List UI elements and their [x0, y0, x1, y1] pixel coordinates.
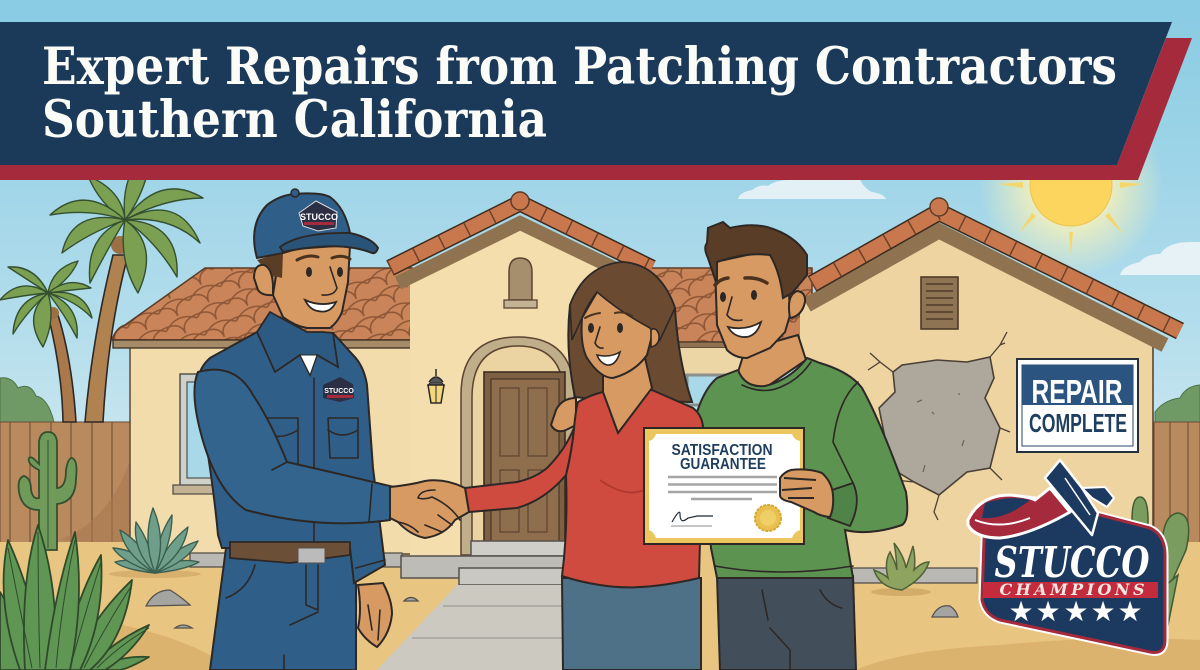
person: woman hair back: [568, 262, 692, 402]
damaged stucco patch with cracks: [868, 332, 1010, 520]
contractor head: [254, 245, 350, 328]
contractor sleeve: [194, 370, 394, 523]
house: left roof: [112, 268, 412, 348]
entry steps: [401, 541, 571, 585]
fence: right: [1154, 422, 1200, 556]
certificate: satisfaction guarantee: GUARANTEE: [680, 456, 766, 473]
person: woman hand on shoulder: [551, 398, 576, 431]
ground: [0, 542, 1200, 670]
certificate: satisfaction guarantee: [644, 428, 804, 544]
palm tree: small: [0, 261, 92, 422]
logo: stucco champions badge: ★★★★★: [1008, 596, 1143, 627]
logo: stucco champions badge: CHAMPIONS: [1000, 580, 1144, 599]
house: left window: [173, 374, 215, 494]
handshake: [390, 480, 469, 538]
house: right wing wall: [800, 235, 1153, 583]
person: woman jeans: [562, 578, 701, 670]
contractor belt: [230, 542, 350, 563]
house: centre gable: [390, 192, 652, 283]
house: mid roof: [640, 268, 812, 405]
cloud: centre: [738, 180, 886, 199]
certificate: satisfaction guarantee: SATISFACTION: [672, 442, 772, 459]
cactus: behind logo: [1132, 497, 1189, 640]
person: contractor: [194, 189, 394, 670]
house: small arched window: [504, 258, 537, 308]
logo: stucco champions badge: STUCCO: [994, 538, 1150, 587]
banner: [0, 22, 1192, 180]
person: man neck: [738, 335, 806, 388]
rocks: [146, 590, 958, 628]
sign: repair complete: COMPLETE: [1029, 408, 1127, 438]
contractor chest patch: [323, 377, 354, 402]
plant: large green agave: [0, 525, 149, 670]
sign: repair complete: REPAIR: [1032, 373, 1123, 410]
person: woman face: [570, 262, 675, 378]
house: centre wall: [410, 228, 690, 556]
person: man trousers: [717, 576, 856, 670]
sun: [979, 93, 1163, 277]
plant: small right shrub: [871, 543, 931, 596]
sign: repair complete: [1017, 359, 1138, 452]
person: woman top and arm: [465, 358, 703, 587]
palm tree: large: [50, 175, 203, 422]
logo: stucco champions badge: [968, 460, 1165, 652]
cloud: right: [1120, 242, 1200, 275]
bushes behind the fence: [0, 378, 1200, 422]
house: left wing wall: [130, 346, 412, 567]
contractor shirt: [197, 312, 385, 583]
house: right gable: [807, 198, 1180, 345]
fence: left: [0, 422, 130, 544]
contractor cap: STUCCO: [300, 212, 338, 222]
house: wall lamp: [428, 369, 444, 403]
house: arched entry and door: [461, 337, 574, 555]
house: gable vent: [921, 277, 958, 329]
cactus: left: [19, 432, 76, 550]
person: man hand holding certificate: [780, 469, 833, 517]
title: Southern California: [42, 90, 547, 150]
plant: blue agave: [109, 508, 201, 578]
contractor cap: [254, 189, 378, 258]
contractor relaxed hand: [358, 583, 392, 647]
walkway: [377, 585, 565, 670]
person: man head: [705, 222, 807, 358]
contractor trousers: [210, 548, 356, 670]
person: man sweater: [697, 358, 907, 578]
contractor chest patch: STUCCO: [324, 388, 354, 395]
